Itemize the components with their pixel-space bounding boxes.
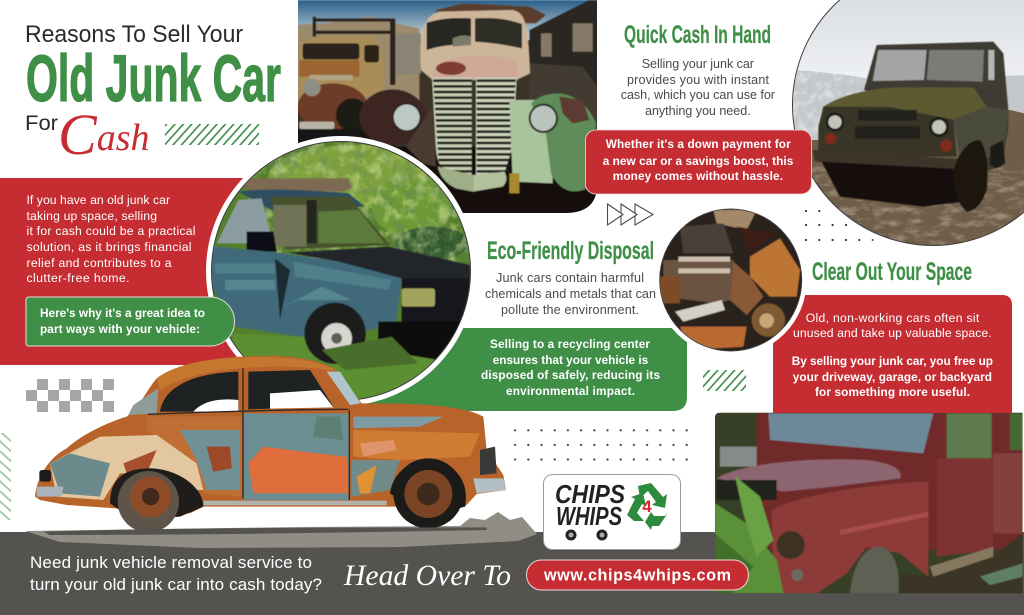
illustration: rusty vintage car (35, 356, 506, 535)
logo: chips 4 whips: 4 (642, 497, 652, 516)
callout: why part ways: Here's why it's a great idea to (40, 306, 205, 320)
callout: why part ways (26, 297, 234, 346)
photo: burnt car in circle (659, 208, 806, 352)
eco disposal text in green panel: disposed of safely, reducing its (481, 368, 660, 382)
callout: down payment (586, 130, 812, 194)
eco disposal text in green panel (481, 337, 660, 398)
intro paragraph: it for cash could be a practical (26, 224, 196, 238)
intro paragraph: clutter-free home. (26, 271, 130, 285)
bottom band (0, 532, 1024, 615)
clear space text: your driveway, garage, or backyard (793, 370, 992, 384)
clear space text: for something more useful. (815, 385, 970, 399)
panel: eco green (352, 328, 687, 411)
intro paragraph: relief and contributes to a (26, 256, 172, 270)
left hatch accent (0, 433, 11, 520)
photo: rusty old trucks (296, 0, 600, 215)
photo: red truck with fern (713, 410, 1023, 597)
CTA question (30, 553, 322, 594)
panel: clear space red (773, 295, 1012, 413)
icon: triple arrows (608, 204, 653, 225)
url pill (526, 560, 748, 590)
logo: chips 4 whips (544, 474, 680, 550)
hatch right (703, 370, 746, 391)
eco disposal text in green panel: environmental impact. (506, 384, 635, 398)
title: Old Junk Car (26, 41, 281, 115)
quick cash body text: Selling your junk car (642, 57, 754, 71)
clear space text: By selling your junk car, you free up (792, 354, 993, 368)
heading: eco-friendly disposal: Eco-Friendly Disposal (487, 237, 654, 265)
dots near heading (805, 210, 874, 241)
eco body text: Junk cars contain harmful (496, 271, 644, 285)
eco body text (485, 271, 656, 317)
callout: why part ways: part ways with your vehicle: (40, 322, 200, 336)
script: head over to: Head Over To (343, 559, 511, 592)
panel: intro red (0, 178, 300, 365)
CTA question: turn your old junk car into cash today? (30, 575, 322, 594)
eco body text: chemicals and metals that can (485, 287, 656, 301)
logo: chips 4 whips: WHIPS (556, 501, 623, 531)
title hatch accent (165, 124, 259, 145)
quick cash body text: provides you with instant (627, 73, 770, 87)
eco disposal text in green panel: Selling to a recycling center (490, 337, 650, 351)
callout: down payment: Whether it's a down payment for (606, 137, 791, 151)
title: For (25, 112, 58, 135)
dots grid (509, 423, 694, 467)
intro paragraph (26, 193, 196, 285)
title: Reasons To Sell Your (25, 21, 243, 48)
checker pattern (26, 379, 114, 412)
title: C (58, 102, 98, 167)
clear space text: Old, non-working cars often sit (806, 311, 980, 325)
intro paragraph: If you have an old junk car (26, 193, 170, 207)
eco body text: pollute the environment. (501, 303, 639, 317)
quick cash body text (621, 57, 775, 118)
heading: quick cash: Quick Cash In Hand (624, 21, 771, 49)
title (25, 21, 281, 167)
quick cash body text: anything you need. (645, 104, 751, 118)
title: ash (97, 117, 149, 159)
clear space text (792, 311, 993, 399)
clear space text: unused and take up valuable space. (793, 326, 992, 340)
photo: blue damaged car in circle (205, 130, 480, 406)
ground smear (25, 512, 537, 548)
intro paragraph: taking up space, selling (26, 209, 157, 223)
callout: down payment: a new car or a savings boost, this (603, 154, 794, 168)
url pill: www.chips4whips.com (543, 566, 731, 584)
logo: chips 4 whips: CHIPS (555, 479, 626, 509)
photo: muddy jeep in circle (790, 0, 1024, 260)
CTA question: Need junk vehicle removal service to (30, 553, 312, 572)
callout: down payment: money comes without hassle. (613, 169, 783, 183)
eco disposal text in green panel: ensures that your vehicle is (493, 353, 649, 367)
intro paragraph: solution, as it brings financial (26, 240, 192, 254)
quick cash body text: cash, which you can use for (621, 88, 775, 102)
